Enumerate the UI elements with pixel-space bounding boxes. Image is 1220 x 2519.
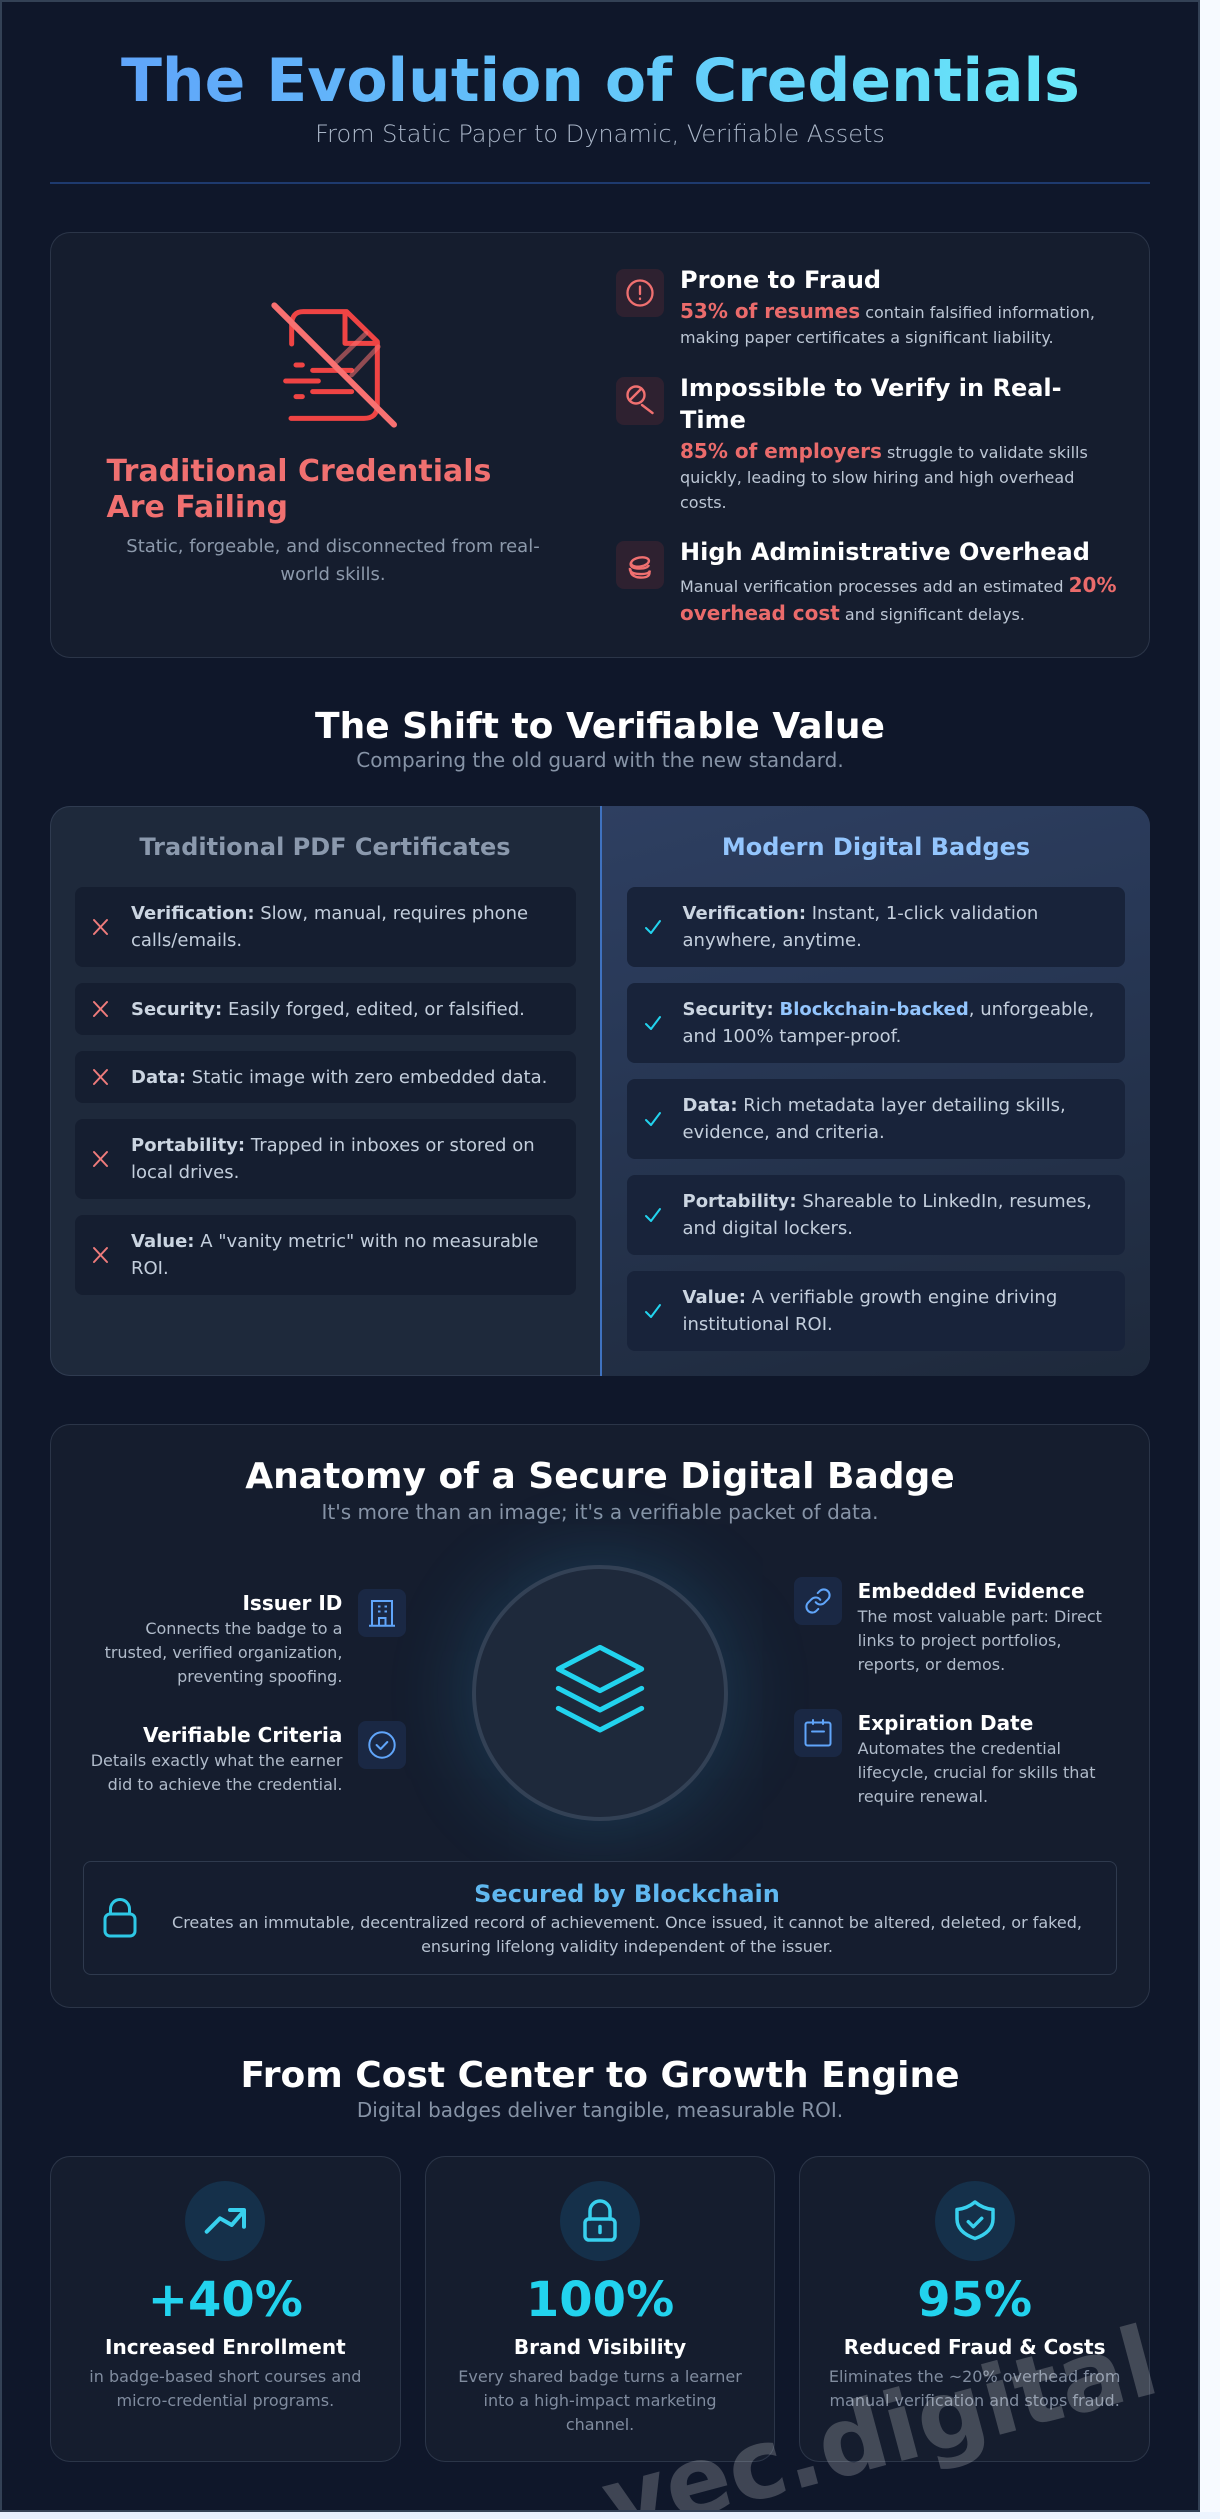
row: security (627, 983, 1125, 1063)
description: The most valuable part: Direct (858, 1606, 1102, 1626)
panel: traditional credentials are failing (50, 232, 1150, 658)
row: value: Value: A verifiable growth engine driving (682, 1287, 1057, 1308)
description: links to project portfolios, (858, 1630, 1061, 1650)
icon: building (358, 1589, 406, 1637)
feature: verifiable criteria (91, 1721, 406, 1794)
row: security: Security: Easily forged, edited, or falsified. (131, 999, 525, 1020)
text: prone to fraud: 53% of resumes contain falsified information, (680, 298, 1095, 322)
icon: layers (556, 1644, 644, 1732)
description: Static, forgeable, and disconnected from real- (126, 536, 540, 557)
icon: shield check (935, 2181, 1015, 2261)
row: data: Data: Rich metadata layer detailing skills, (682, 1095, 1066, 1116)
stat description: into a high-impact marketing (484, 2391, 716, 2410)
row: value: institutional ROI. (682, 1314, 833, 1335)
heading: anatomy: Anatomy of a Secure Digital Badge (245, 1456, 955, 1496)
callout description (172, 1912, 1082, 1956)
text: impossible to verify (680, 374, 1088, 512)
callout description: Creates an immutable, decentralized record of achievement. Once issued, it cannot be altered, deleted, or faked, (172, 1912, 1082, 1932)
text: impossible to verify: 85% of employers struggle to validate skills (680, 438, 1088, 462)
stat description: channel. (566, 2415, 634, 2434)
description: Automates the credential (858, 1738, 1061, 1758)
row: verification: Verification: Instant, 1-click validation (682, 903, 1038, 924)
text: impossible to verify: quickly, leading to slow hiring and high overhead (680, 468, 1074, 487)
icon: lock (104, 1898, 136, 1938)
stat card: enrollment (50, 2156, 401, 2462)
row: verification (75, 887, 576, 967)
stat description: micro-credential programs. (116, 2391, 334, 2410)
icon: link (794, 1577, 842, 1625)
text: impossible to verify: costs. (680, 493, 727, 512)
subheading: the shift: Comparing the old guard with the new standard. (356, 748, 844, 772)
text: prone to fraud (680, 266, 1095, 347)
row: value (75, 1215, 576, 1295)
text: prone to fraud: Prone to Fraud (680, 266, 881, 294)
item: prone to fraud (616, 266, 1095, 347)
label: Verifiable Criteria (143, 1723, 342, 1747)
callout: secured by blockchain (83, 1861, 1117, 1974)
description (858, 1738, 1096, 1806)
stat value: 100% (526, 2272, 674, 2328)
icon: coins (616, 541, 664, 589)
feature: issuer id (105, 1589, 406, 1686)
icon: alert (616, 269, 664, 317)
description (91, 1750, 342, 1794)
feature: expiration date (794, 1709, 1096, 1806)
description: did to achieve the credential. (108, 1774, 342, 1794)
row: portability: and digital lockers. (682, 1218, 853, 1239)
icon: search (616, 377, 664, 425)
description (105, 1618, 342, 1686)
badge circle (472, 1565, 728, 1821)
row: verification: anywhere, anytime. (682, 930, 862, 951)
description (126, 536, 540, 585)
title: The Evolution of Credentials (121, 46, 1080, 116)
text: high administrative overhead: Manual verification processes add an estimated 20% (680, 573, 1116, 597)
stat description (89, 2367, 361, 2410)
heading: Traditional Credentials (106, 454, 491, 488)
description: Details exactly what the earner (91, 1750, 342, 1770)
column: modern digital badges (600, 806, 1150, 1376)
text: high administrative overhead: overhead cost and significant delays. (680, 601, 1025, 625)
stat description (829, 2367, 1120, 2410)
text: high administrative overhead (680, 538, 1116, 625)
row: verification (627, 887, 1125, 967)
stat description: in badge-based short courses and (89, 2367, 361, 2386)
panel: anatomy of a badge (50, 1424, 1150, 2008)
row: value: Value: A "vanity metric" with no measurable (131, 1231, 538, 1252)
stat card: visibility (425, 2156, 775, 2462)
description: world skills. (280, 564, 386, 585)
item: high administrative overhead (616, 538, 1116, 625)
description: require renewal. (858, 1786, 988, 1806)
column title: Modern Digital Badges (722, 832, 1030, 860)
callout heading: Secured by Blockchain (474, 1880, 780, 1908)
stat label: Increased Enrollment (105, 2335, 346, 2359)
heading: roi: From Cost Center to Growth Engine (240, 2054, 960, 2096)
row: data: evidence, and criteria. (682, 1122, 885, 1143)
stat description: Every shared badge turns a learner (458, 2367, 742, 2386)
heading: the shift: The Shift to Verifiable Value (315, 706, 885, 746)
column: traditional pdf certificates (75, 832, 576, 1295)
description: lifecycle, crucial for skills that (858, 1762, 1096, 1782)
heading: Are Failing (106, 490, 288, 525)
item: impossible to verify (616, 374, 1088, 512)
icon: trend up (185, 2181, 265, 2261)
row: data (75, 1051, 576, 1103)
description: trusted, verified organization, (105, 1642, 342, 1662)
subheading: anatomy: It's more than an image; it's a verifiable packet of data. (321, 1500, 878, 1524)
stat card: fraud and costs (799, 2156, 1150, 2462)
text: high administrative overhead: High Administrative Overhead (680, 538, 1090, 566)
icon: calendar (794, 1709, 842, 1757)
row: data (627, 1079, 1125, 1159)
row: portability (75, 1119, 576, 1199)
description (858, 1606, 1102, 1674)
subheading: roi: Digital badges deliver tangible, measurable ROI. (357, 2098, 843, 2122)
row: security: and 100% tamper-proof. (682, 1026, 901, 1047)
row: portability: local drives. (131, 1162, 239, 1183)
text: prone to fraud: making paper certificates a significant liability. (680, 328, 1054, 347)
description: Connects the badge to a (145, 1618, 342, 1638)
row: value (627, 1271, 1125, 1351)
text: impossible to verify: Time (680, 406, 746, 434)
icon: crossed-out document (271, 302, 397, 428)
column title: Traditional PDF Certificates (139, 832, 511, 860)
row: value: ROI. (131, 1258, 169, 1279)
row: security: Security: Blockchain-backed, unforgeable, (682, 999, 1094, 1020)
stat description: Eliminates the ~20% overhead from (829, 2367, 1120, 2386)
callout description: ensuring lifelong validity independent of the issuer. (421, 1936, 833, 1956)
description: reports, or demos. (858, 1654, 1005, 1674)
panel: comparison (50, 806, 1150, 1376)
row: portability (627, 1175, 1125, 1255)
text: impossible to verify: Impossible to Verify in Real- (680, 374, 1062, 402)
heading (106, 454, 491, 525)
row: portability: Portability: Trapped in inboxes or stored on (131, 1135, 535, 1156)
stat label: Reduced Fraud & Costs (844, 2335, 1105, 2359)
row: portability: Portability: Shareable to LinkedIn, resumes, (682, 1191, 1092, 1212)
subtitle: From Static Paper to Dynamic, Verifiable Assets (315, 120, 885, 148)
icon: lock (560, 2181, 640, 2261)
label: Expiration Date (858, 1711, 1033, 1735)
label: Issuer ID (242, 1591, 342, 1615)
stat description (458, 2367, 742, 2434)
feature: embedded evidence (794, 1577, 1102, 1674)
description: preventing spoofing. (177, 1666, 342, 1686)
row: data: Data: Static image with zero embedded data. (131, 1067, 547, 1088)
stat description: manual verification and stops fraud. (829, 2391, 1120, 2410)
row: security (75, 983, 576, 1035)
stat value: +40% (148, 2272, 303, 2328)
label: Embedded Evidence (858, 1579, 1085, 1603)
stat value: 95% (917, 2272, 1032, 2328)
row: verification: calls/emails. (131, 930, 242, 951)
row: verification: Verification: Slow, manual, requires phone (131, 903, 528, 924)
icon: check circle (358, 1721, 406, 1769)
stat label: Brand Visibility (514, 2335, 686, 2359)
